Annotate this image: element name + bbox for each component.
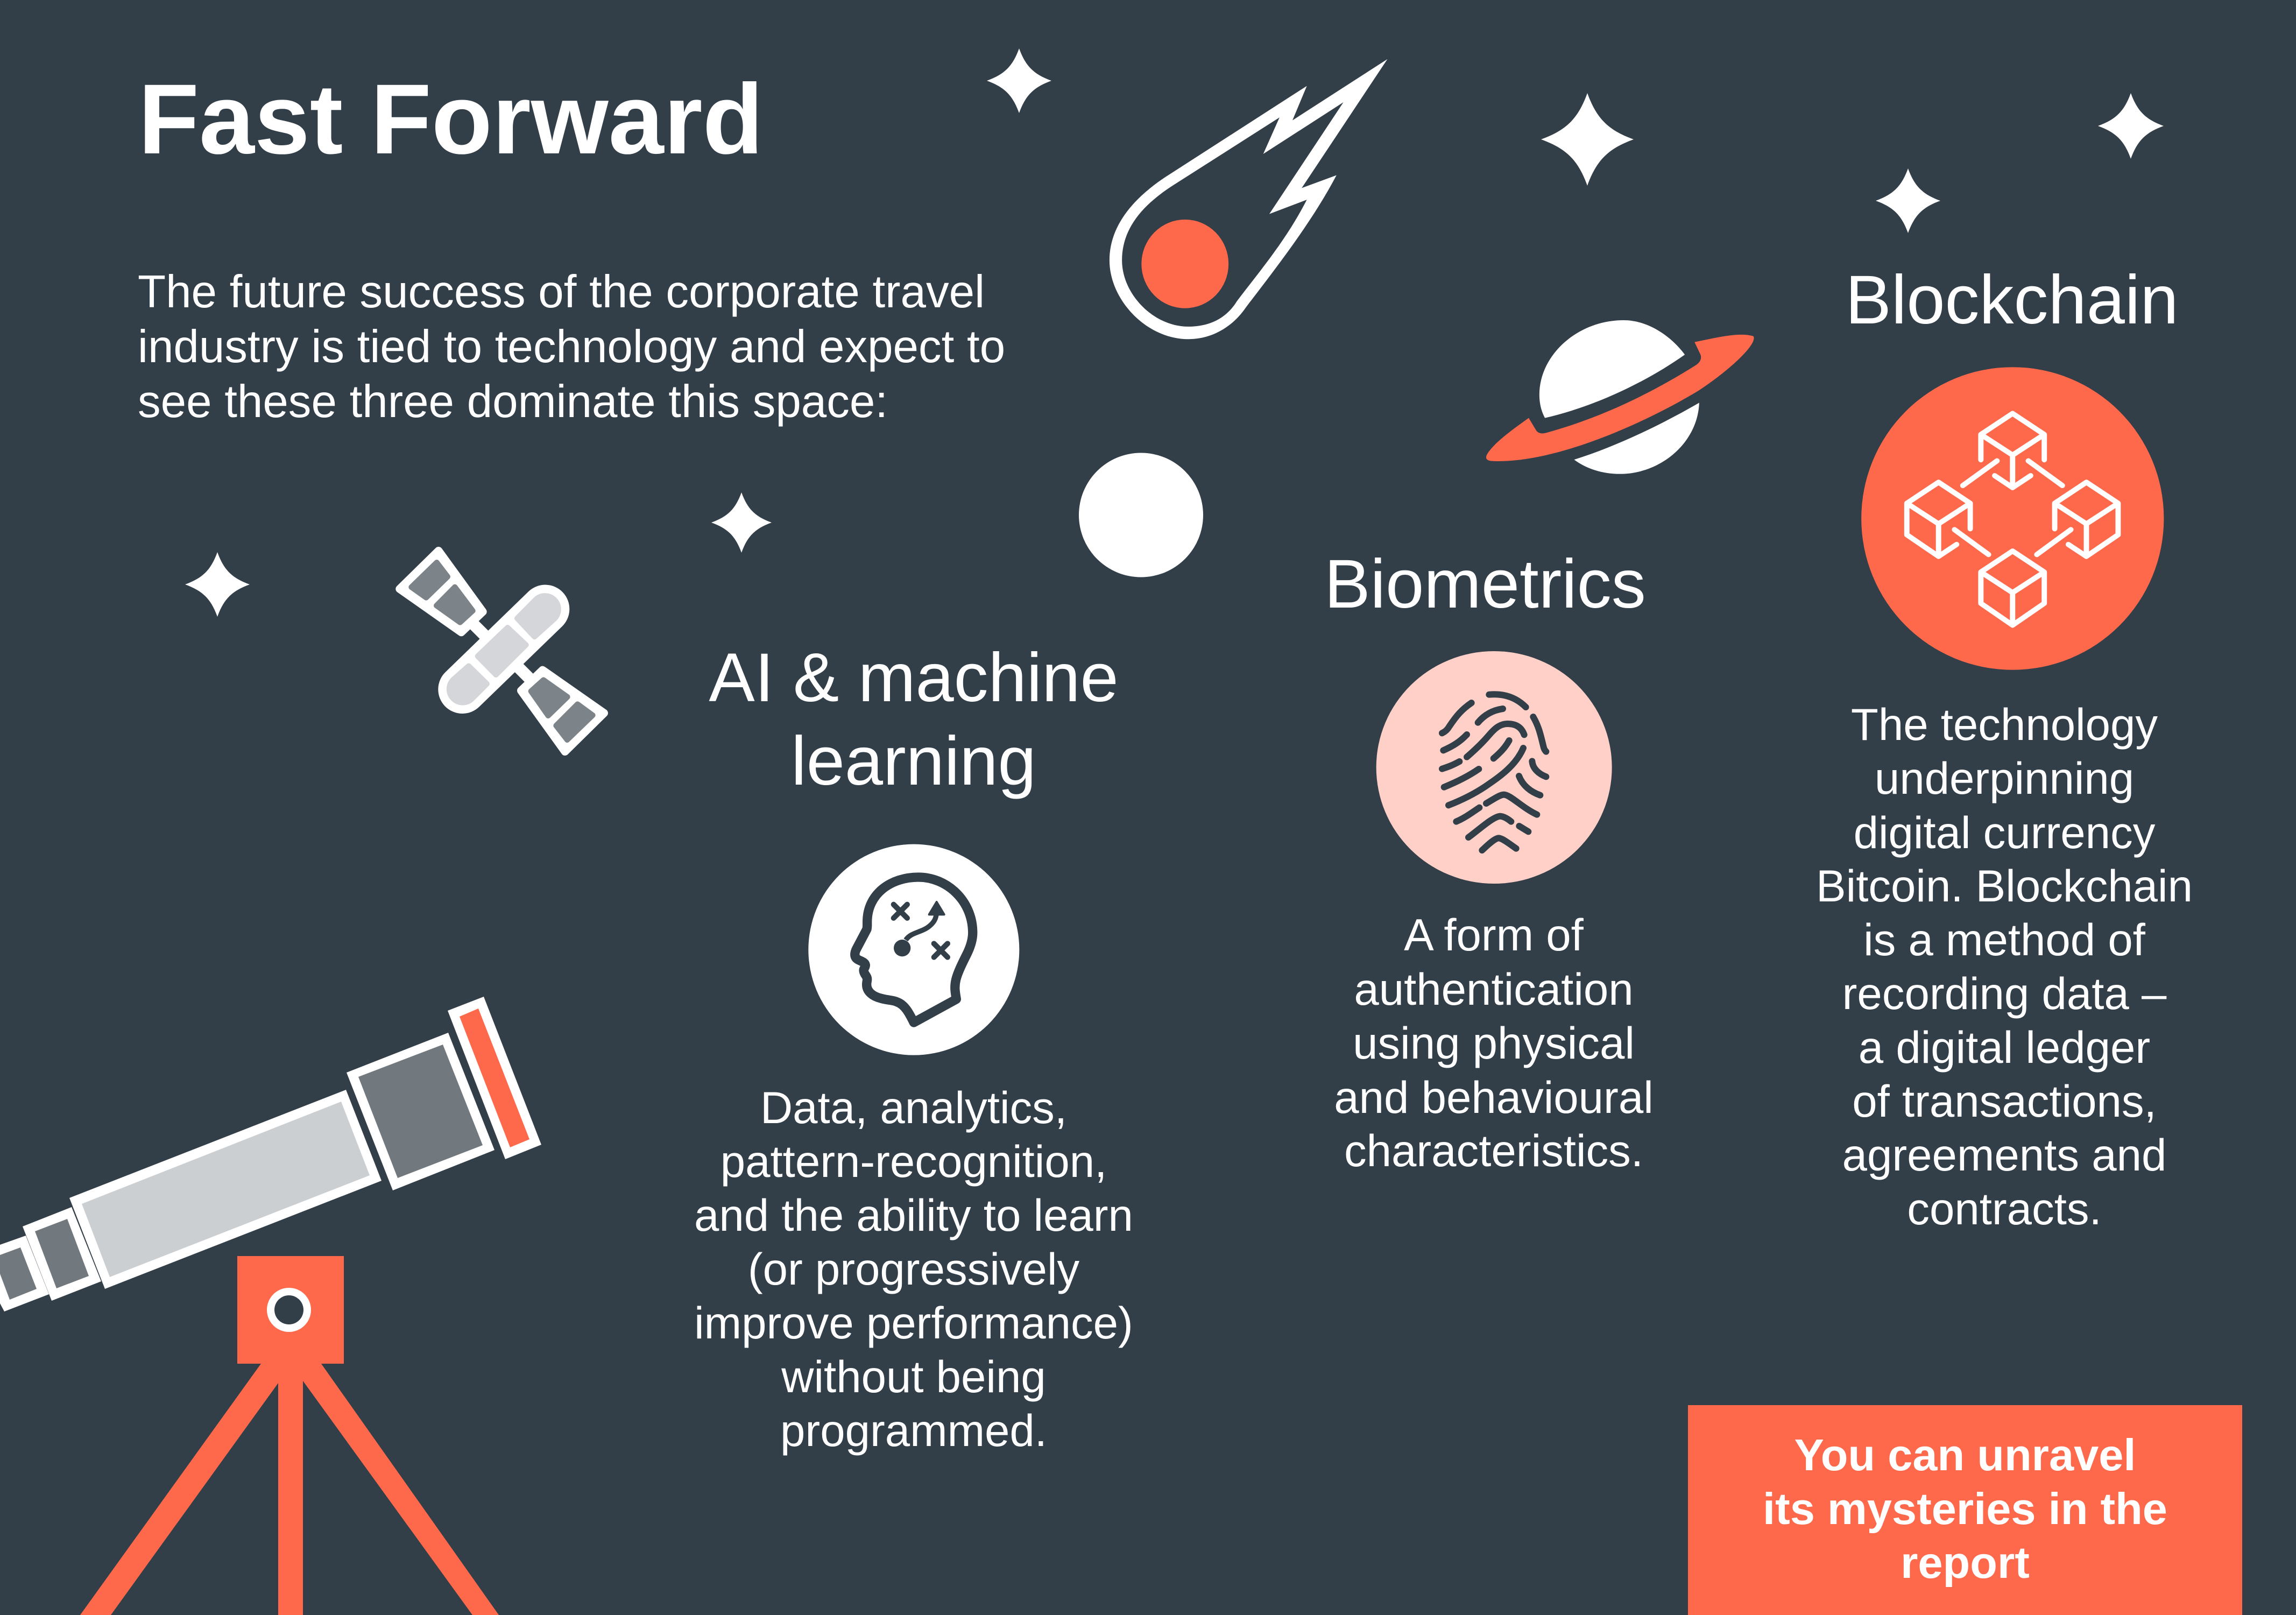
text: Blockchain description: The technology: [1851, 700, 2158, 750]
icon: star 6: [185, 552, 250, 617]
text: Biometrics description: authentication: [1354, 964, 1634, 1014]
text: Blockchain description: contracts.: [1907, 1184, 2102, 1234]
icon: satellite: [400, 551, 604, 752]
heading: AI and machine learning: [709, 639, 1119, 800]
text: Blockchain description: is a method of: [1863, 915, 2146, 965]
text: Blockchain description: underpinning: [1875, 753, 2134, 803]
text: Blockchain description: a digital ledger: [1859, 1022, 2150, 1073]
callout: report call to action: its mysteries in the: [1763, 1484, 2167, 1534]
heading: AI and machine learning: AI & machine: [709, 639, 1119, 716]
text: AI description: (or progressively: [748, 1244, 1079, 1294]
icon: star 3: [2098, 93, 2164, 159]
intro text block: industry is tied to technology and expect to: [138, 321, 1005, 372]
icon: telescope: [0, 997, 541, 1615]
callout: report call to action: You can unravel: [1795, 1430, 2136, 1480]
intro text block: see these three dominate this space:: [138, 376, 888, 427]
icon: star 4: [1876, 168, 1940, 233]
text: Blockchain description: digital currency: [1854, 808, 2156, 858]
intro text block: [138, 266, 1005, 427]
text: AI description: improve performance): [694, 1298, 1133, 1348]
icon: star 5: [711, 492, 772, 553]
text: Blockchain description: agreements and: [1842, 1130, 2166, 1180]
text: AI description: [694, 1083, 1133, 1456]
text: AI description: and the ability to learn: [694, 1190, 1133, 1240]
icon: fingerprint: [1376, 651, 1612, 884]
icon: head with strategy: [808, 844, 1019, 1055]
text: Blockchain description: Bitcoin. Blockchain: [1816, 861, 2193, 911]
text: Biometrics description: using physical: [1353, 1018, 1635, 1068]
icon: white moon: [1079, 453, 1203, 577]
intro text block: The future success of the corporate travel: [138, 266, 985, 318]
icon: planet with ring: [1486, 320, 1754, 474]
text: Biometrics description: and behavioural: [1334, 1073, 1654, 1123]
text: Biometrics description: characteristics.: [1344, 1126, 1643, 1176]
icon: star 2: [1541, 93, 1634, 186]
text: AI description: programmed.: [780, 1406, 1047, 1456]
title: Fast Forward: [138, 64, 764, 175]
text: AI description: Data, analytics,: [760, 1083, 1067, 1133]
text: Blockchain description: recording data –: [1842, 969, 2167, 1019]
heading: Biometrics: Biometrics: [1324, 546, 1646, 623]
heading: Blockchain: Blockchain: [1846, 262, 2178, 338]
text: Blockchain description: [1816, 700, 2193, 1234]
text: Biometrics description: A form of: [1404, 910, 1584, 960]
callout: report call to action: [1688, 1405, 2242, 1615]
text: Biometrics description: [1334, 910, 1654, 1176]
text: AI description: pattern-recognition,: [720, 1137, 1107, 1187]
icon: star 1: [987, 48, 1051, 113]
text: AI description: without being: [781, 1352, 1046, 1402]
callout: report call to action: report: [1901, 1538, 2030, 1588]
icon: comet: [1110, 59, 1387, 339]
text: Blockchain description: of transactions,: [1852, 1076, 2157, 1126]
heading: AI and machine learning: learning: [791, 723, 1036, 800]
icon: blockchain cubes: [1861, 367, 2164, 670]
